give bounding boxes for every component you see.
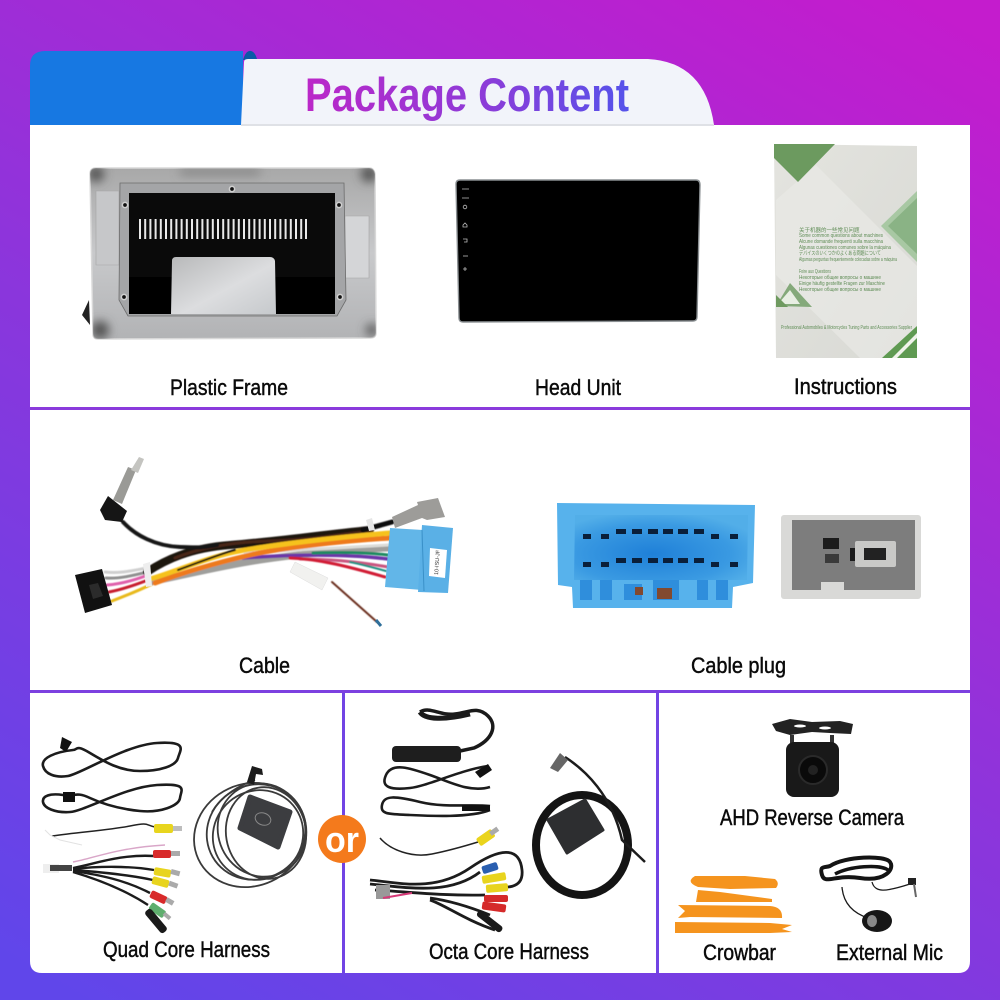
icon: external microphone [821, 857, 916, 932]
panel: accessories [675, 719, 943, 965]
cover light bands [776, 165, 917, 358]
booklet cover [774, 144, 917, 358]
screws [121, 186, 343, 300]
cable loop 2 [382, 797, 490, 816]
black connector [75, 569, 112, 613]
or badge: or [325, 819, 359, 860]
rca video cable [380, 827, 499, 855]
grey plug [781, 515, 921, 599]
frame shading [88, 166, 378, 339]
panel: head unit [456, 180, 700, 400]
blue tip [376, 620, 381, 626]
booklet text: Alcune domande frequenti sulla macchina [799, 239, 884, 245]
booklet text: Algumas perguntas frequentemente colocadas sobre a máquina [799, 257, 898, 263]
label: Cable [239, 653, 290, 678]
grey connector [392, 498, 445, 528]
cable loop 2 [43, 785, 182, 812]
white content panel [30, 125, 970, 973]
icon: crowbar pry tools [675, 876, 792, 933]
booklet text: Algunas cuestiones comunes sobre la máquina [799, 245, 892, 251]
rca harness [370, 852, 522, 933]
blue harness connector: 10-ISU-JF [434, 549, 442, 575]
antenna plug [100, 457, 144, 522]
panel: cable [75, 457, 453, 678]
label: Plastic Frame [170, 375, 288, 400]
blue harness connector [385, 525, 453, 593]
label: Instructions [794, 374, 897, 399]
wedge clip [82, 300, 90, 325]
or badge [318, 815, 366, 863]
cable ties [143, 562, 152, 587]
blue ribbon [30, 51, 243, 125]
panel: cable plug [557, 503, 921, 678]
cable loop 1 [43, 743, 181, 777]
label: AHD Reverse Camera [720, 805, 905, 830]
label: Crowbar [703, 940, 776, 965]
title tab background [241, 59, 714, 125]
green triangles [774, 144, 917, 358]
label: External Mic [836, 940, 943, 965]
booklet text: 关于机器的一些常见问题 [799, 226, 860, 234]
black window [129, 193, 335, 314]
side tabs [96, 191, 119, 265]
rca video cable [45, 824, 182, 845]
wire bundle [105, 522, 392, 622]
booklet text: Some common questions about machines [799, 233, 883, 239]
cable loop 1 [384, 766, 490, 789]
screen [456, 180, 700, 322]
gps antenna [536, 753, 645, 895]
recess [119, 183, 346, 316]
rca harness [43, 845, 180, 934]
side buttons [462, 189, 469, 271]
booklet text: Некоторые общие вопросы о машине [799, 287, 881, 293]
frame body [90, 168, 376, 339]
icon: reverse camera [772, 719, 853, 797]
booklet text: Einige häufig gestellte Fragen zur Maschine [799, 281, 885, 287]
label: Quad Core Harness [103, 937, 270, 962]
panel: plastic frame [82, 166, 378, 400]
label: Cable plug [691, 653, 786, 678]
booklet text: Foire aux Questions [799, 269, 831, 275]
antenna bar [392, 746, 461, 762]
usb plug 1 [60, 737, 72, 752]
wire tag [290, 562, 328, 590]
booklet text: Некоторые общие вопросы о машине [799, 275, 881, 281]
booklet text [781, 226, 912, 331]
panel: instructions [774, 144, 917, 399]
label: Octa Core Harness [429, 939, 589, 964]
vent slats [139, 219, 307, 239]
top antenna cable [420, 710, 493, 751]
silver tab [171, 257, 276, 314]
plug slots [583, 529, 738, 567]
panel: octa core harness [370, 710, 645, 964]
gps antenna [177, 765, 323, 905]
header tab [30, 51, 714, 125]
booklet text: デバイスのいくつかのよくある問題について [799, 249, 881, 257]
ribbon fold [243, 51, 257, 60]
usb plug 2 [63, 792, 75, 802]
booklet text: Professional Automobiles & Motorcycles Tuning Parts and Accessories Supplier [781, 325, 912, 331]
blue plug [557, 503, 755, 608]
title: Package Content [305, 68, 629, 121]
label: Head Unit [535, 375, 621, 400]
panel: quad core harness [43, 737, 323, 962]
